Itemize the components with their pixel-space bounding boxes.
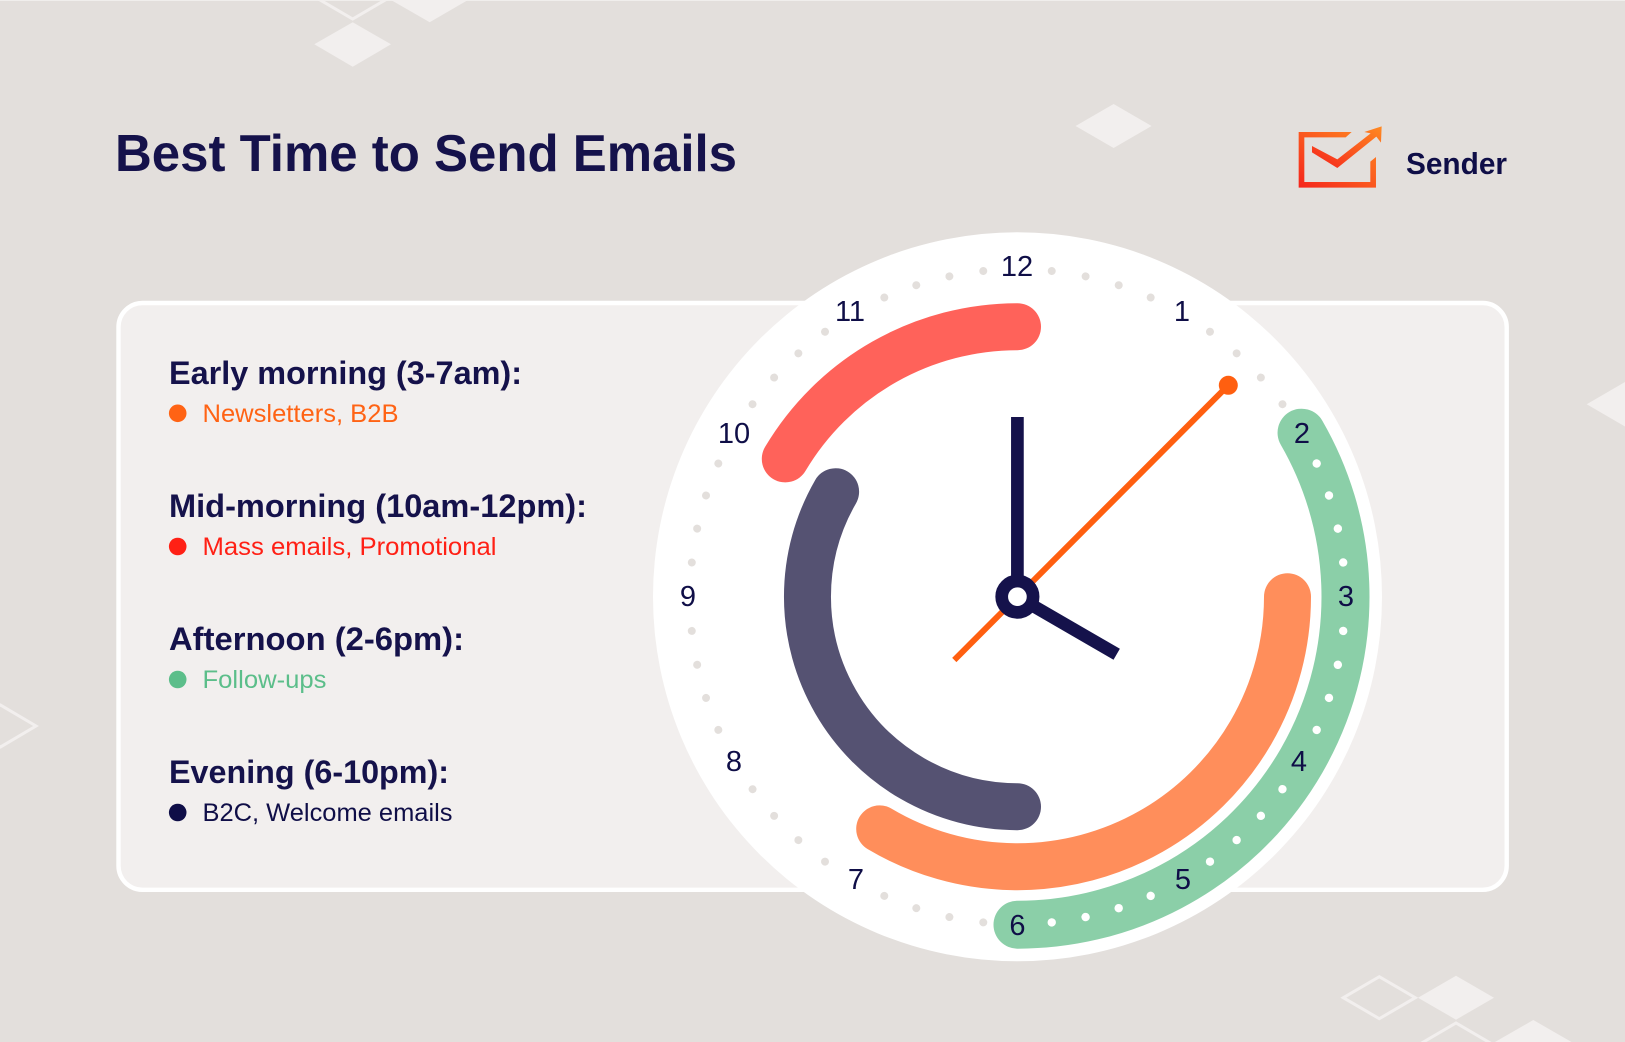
minute ticks — [687, 267, 1348, 927]
legend: evening: Evening (6-10pm): — [169, 754, 449, 790]
clock hands — [954, 376, 1238, 660]
legend: early morning: Early morning (3-7am): — [169, 355, 522, 391]
clock numbers: 2 — [1294, 418, 1310, 450]
legend: afternoon — [169, 621, 464, 694]
legend: early morning — [169, 355, 522, 428]
clock numbers: 6 — [1009, 910, 1026, 942]
clock numbers: 1 — [1174, 296, 1190, 328]
clock numbers: 4 — [1291, 746, 1307, 778]
clock numbers: 11 — [835, 296, 865, 328]
arc: early morning 3-7 (orange) — [880, 597, 1288, 867]
clock numbers: 12 — [1001, 251, 1033, 283]
logo: Sender: Sender — [1406, 146, 1507, 181]
hub — [1002, 581, 1033, 612]
legend: afternoon: Follow-ups — [202, 666, 326, 694]
clock numbers — [680, 251, 1354, 942]
legend: evening — [169, 754, 452, 827]
logo: Sender — [1299, 126, 1507, 188]
clock numbers: 8 — [726, 746, 742, 778]
icon: envelope with check arrow — [1299, 126, 1382, 188]
title: Best Time to Send Emails — [115, 125, 737, 183]
legend: mid-morning — [169, 488, 587, 561]
clock face — [653, 232, 1382, 961]
arc: mid-morning 10-12 (red) — [785, 327, 1018, 459]
arc: evening 6-10 (purple) — [807, 492, 1018, 807]
legend: mid-morning: Mid-morning (10am-12pm): — [169, 488, 587, 524]
legend: evening: B2C, Welcome emails — [202, 799, 452, 827]
clock numbers: 10 — [718, 418, 750, 450]
clock — [653, 232, 1382, 961]
arc: afternoon 2-6 (green) — [1018, 433, 1345, 925]
legend: afternoon: Afternoon (2-6pm): — [169, 621, 464, 657]
clock numbers: 5 — [1175, 864, 1191, 896]
minute hand — [1011, 417, 1024, 597]
clock numbers: 3 — [1338, 581, 1354, 613]
clock numbers: 7 — [848, 864, 864, 896]
panel: legend card — [118, 303, 1507, 890]
clock numbers: 9 — [680, 581, 696, 613]
hour hand — [1017, 597, 1117, 654]
second hand — [954, 376, 1238, 660]
legend: mid-morning: Mass emails, Promotional — [202, 533, 496, 561]
legend: early morning: Newsletters, B2B — [202, 400, 398, 428]
